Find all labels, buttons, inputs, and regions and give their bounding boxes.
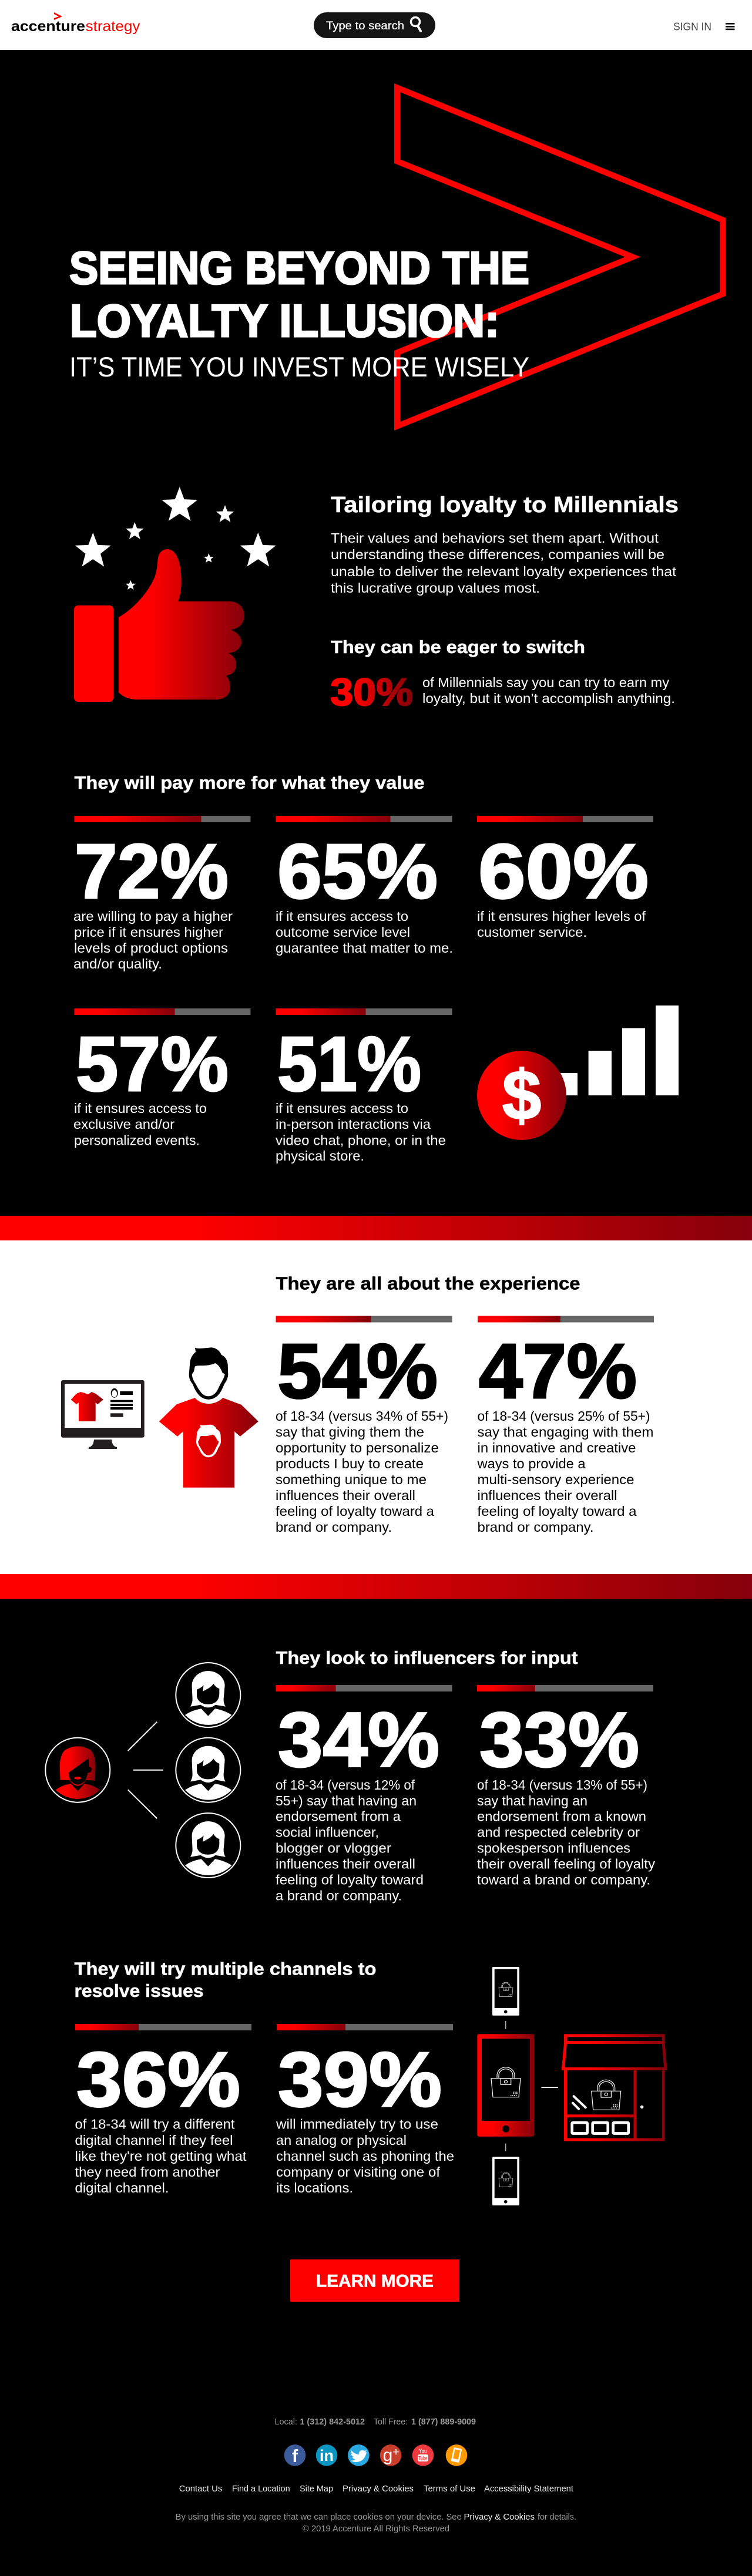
stat: 54%: 54%: [277, 1328, 438, 1414]
stat: 36%: 36%: [76, 2036, 240, 2123]
stat: 33%: say that having an: [477, 1793, 588, 1808]
stat: 54%: products I buy to create: [276, 1456, 424, 1471]
heading: [74, 1958, 376, 2001]
icon: dollar coin with rising bars: $: [502, 1056, 541, 1135]
panel: tailoring loyalty: [74, 487, 679, 714]
panel: influencers: [45, 1647, 656, 1903]
icon: monitor with shirt: [61, 1380, 145, 1449]
stat: 47%: of 18-34 (versus 25% of 55+): [477, 1408, 650, 1424]
cookie notice and copyright: Privacy & Cookies: [464, 2513, 535, 2522]
stat: 57%: 57%: [76, 1021, 229, 1107]
stat: 33%: endorsement from a known: [477, 1809, 646, 1824]
stat: 39%: will immediately try to use: [276, 2117, 438, 2132]
footer links: Find a Location: [232, 2484, 290, 2494]
stat: 47%: ways to provide a: [476, 1456, 586, 1471]
stat: 72%: 72%: [75, 828, 229, 914]
stat: 57%: exclusive and/or: [73, 1117, 174, 1132]
stat: 60%: [477, 816, 653, 940]
stat: 33%: [477, 1685, 656, 1888]
stat: 57%: if it ensures access to: [74, 1101, 207, 1116]
logo: accenture strategy: [11, 12, 140, 35]
heading: eager to switch: They can be eager to switch: [331, 637, 585, 657]
intro paragraph: this lucrative group values most.: [331, 580, 540, 596]
icon: youtube: [412, 2444, 434, 2466]
icon: top phone: [492, 1967, 519, 2016]
stat: 65%: if it ensures access to: [276, 909, 408, 924]
hero panel: [69, 88, 723, 426]
stat: 54%: brand or company.: [276, 1519, 392, 1535]
cookie notice and copyright: © 2019 Accenture All Rights Reserved: [303, 2524, 449, 2534]
icon: thumbs up with stars: [74, 487, 276, 702]
stat: 47%: influences their overall: [477, 1488, 617, 1503]
stat: 34%: of 18-34 (versus 12% of: [276, 1777, 415, 1793]
stat: 47%: brand or company.: [477, 1519, 593, 1535]
heading: They will pay more for what they value: [74, 772, 424, 793]
intro paragraph: [331, 530, 677, 596]
icon: google plus: [380, 2444, 401, 2466]
stat: 60%: 60%: [478, 828, 649, 914]
stat: 33%: toward a brand or company.: [477, 1872, 650, 1888]
stat: 54%: something unique to me: [276, 1472, 427, 1487]
stat: 54%: [276, 1316, 452, 1535]
stat description: of Millennials say you can try to earn my: [422, 675, 670, 690]
stat: 54%: feeling of loyalty toward a: [276, 1504, 434, 1519]
stat: 54%: influences their overall: [276, 1488, 415, 1503]
stat: 57%: personalized events.: [74, 1132, 200, 1148]
title: [69, 242, 529, 347]
stat: 39%: [276, 2024, 454, 2195]
icon: twitter: [348, 2444, 370, 2466]
stat: 51%: physical store.: [276, 1148, 364, 1163]
footer links: Accessibility Statement: [484, 2484, 573, 2494]
icon: youtube: Tube: [418, 2455, 428, 2462]
contact numbers: [275, 2417, 476, 2427]
icon: youtube: You: [419, 2448, 427, 2455]
stat description: [422, 675, 675, 706]
stat: 51%: video chat, phone, or in the: [276, 1132, 446, 1148]
stat: 34%: endorsement from a: [276, 1809, 401, 1824]
stat: 36%: [75, 2024, 251, 2195]
footer: [176, 2417, 576, 2534]
footer links: [179, 2484, 573, 2494]
stat: 47%: multi-sensory experience: [477, 1472, 634, 1487]
learn more button: [290, 2259, 459, 2302]
stat: 39%: its locations.: [276, 2180, 353, 2195]
intro paragraph: understanding these differences, companies will be: [331, 547, 664, 562]
heading: resolve issues: [74, 1980, 203, 2001]
icon: facebook: [284, 2444, 306, 2466]
stat: 72%: and/or quality.: [73, 956, 162, 971]
heading: They are all about the experience: [276, 1273, 580, 1293]
panel: they will pay more: [73, 772, 679, 1163]
contact numbers: 1 (312) 842-5012: [300, 2417, 365, 2427]
panel: multiple channels: [74, 1958, 666, 2205]
stat: 33%: and respected celebrity or: [477, 1824, 640, 1839]
stat: 60%: if it ensures higher levels of: [477, 909, 646, 924]
stat: 72%: price if it ensures higher: [74, 924, 223, 940]
contact numbers: Local:: [275, 2417, 297, 2427]
contact numbers: Toll Free:: [374, 2417, 408, 2427]
footer links: Contact Us: [179, 2484, 222, 2494]
header bar: [0, 0, 752, 50]
social icons: [284, 2444, 467, 2466]
footer links: Site Map: [300, 2484, 333, 2494]
heading: tailoring loyalty to millennials: Tailoring loyalty to Millennials: [331, 493, 679, 517]
stat: 47%: feeling of loyalty toward a: [477, 1504, 637, 1519]
heading: They will try multiple channels to: [74, 1958, 376, 1979]
stat: 57%: [73, 1008, 250, 1148]
stat: 36%: they need from another: [75, 2164, 220, 2180]
sign in: SIGN IN: [673, 21, 711, 33]
icon: google plus: g: [383, 2446, 392, 2465]
stat: 33%: spokesperson influences: [477, 1841, 630, 1856]
intro paragraph: Their values and behaviors set them apart. Without: [331, 530, 659, 546]
stat: 34%: influences their overall: [276, 1856, 415, 1871]
stat: 47%: in innovative and creative: [477, 1440, 636, 1455]
stat: 36%: like they're not getting what: [75, 2148, 247, 2164]
stat: 60%: customer service.: [477, 924, 587, 940]
icon: facebook: f: [292, 2446, 298, 2466]
contact numbers: 1 (877) 889-9009: [411, 2417, 476, 2427]
stat: 33%: 33%: [479, 1696, 639, 1783]
stat: 33%: of 18-34 (versus 13% of 55+): [477, 1777, 647, 1793]
icon: google plus: +: [392, 2446, 400, 2459]
stat: 34%: feeling of loyalty toward: [276, 1872, 424, 1888]
stat: 65%: [276, 816, 453, 956]
title: LOYALTY ILLUSION:: [70, 295, 499, 347]
red gradient band: [0, 1574, 752, 1599]
stat: 34%: 55+) say that having an: [276, 1793, 417, 1808]
stat: 72%: [73, 816, 250, 971]
stat description: loyalty, but it won’t accomplish anything.: [422, 691, 675, 706]
stat: 54%: opportunity to personalize: [276, 1440, 439, 1455]
cookie notice and copyright: By using this site you agree that we can place cookies on your device. See: [176, 2513, 462, 2522]
stat: 39%: 39%: [278, 2036, 442, 2123]
stat: 47%: 47%: [479, 1328, 637, 1414]
icon: mobile: [446, 2444, 467, 2466]
stat: 39%: channel such as phoning the: [276, 2148, 454, 2164]
logo: accenture strategy: accenture: [11, 18, 85, 35]
stat: 72%: are willing to pay a higher: [73, 909, 233, 924]
icon: bottom phone: [492, 2157, 519, 2205]
icon: phones, tablet and store: [477, 1967, 666, 2205]
stat: 36%: digital channel if they feel: [75, 2133, 233, 2148]
logo: accenture strategy: strategy: [86, 18, 140, 35]
stat: 34%: 34%: [278, 1696, 439, 1783]
stat: 39%: company or visiting one of: [276, 2164, 441, 2180]
stat: 51%: [276, 1008, 452, 1163]
icon: person in custom t-shirt: [159, 1347, 258, 1488]
icon: red store: [563, 2036, 666, 2140]
stat: 34%: social influencer,: [276, 1824, 379, 1839]
stat: 33%: their overall feeling of loyalty: [477, 1856, 656, 1871]
footer links: Privacy & Cookies: [343, 2484, 414, 2494]
icon: linkedin: in: [320, 2447, 334, 2464]
search pill: Type to search: [326, 20, 404, 32]
subtitle: IT’S TIME YOU INVEST MORE WISELY: [69, 351, 529, 382]
stat: 30%: 30%: [330, 670, 413, 714]
stat: 51%: if it ensures access to: [276, 1101, 408, 1116]
accenture arrow outline: [397, 88, 723, 426]
stat: 51%: 51%: [277, 1021, 421, 1107]
icon: red tablet: [477, 2034, 534, 2137]
stat: 65%: outcome service level: [276, 924, 410, 940]
intro paragraph: unable to deliver the relevant loyalty experiences that: [331, 564, 677, 579]
heading: They look to influencers for input: [276, 1647, 578, 1668]
cookie notice and copyright: [176, 2513, 576, 2534]
icon: linkedin: [316, 2444, 337, 2466]
stat: 34%: a brand or company.: [276, 1888, 402, 1903]
stat: 65%: 65%: [277, 828, 438, 914]
stat: 34%: [276, 1685, 452, 1903]
cookie notice and copyright: for details.: [538, 2513, 576, 2522]
hamburger menu icon: [726, 23, 734, 30]
stat: 51%: in-person interactions via: [276, 1117, 431, 1132]
stat: 47%: say that engaging with them: [477, 1424, 653, 1440]
stat: 47%: [476, 1316, 654, 1535]
title: SEEING BEYOND THE: [69, 242, 529, 294]
red gradient band: [0, 1216, 752, 1240]
stat: 39%: an analog or physical: [276, 2133, 407, 2148]
stat: 36%: digital channel.: [75, 2180, 169, 2195]
stat: 54%: of 18-34 (versus 34% of 55+): [276, 1408, 448, 1424]
stat: 54%: say that giving them the: [276, 1424, 424, 1440]
icon: influencer network: [45, 1663, 240, 1878]
stat: 34%: blogger or vlogger: [276, 1841, 391, 1856]
stat: 65%: guarantee that matter to me.: [276, 940, 453, 956]
stat: 72%: levels of product options: [74, 940, 228, 956]
learn more button: LEARN MORE: [316, 2272, 434, 2291]
search pill: [314, 12, 435, 38]
icon: dollar coin with rising bars: [477, 1005, 679, 1140]
footer links: Terms of Use: [424, 2484, 475, 2494]
stat: 36%: of 18-34 will try a different: [75, 2117, 235, 2132]
panel: all about the experience: [0, 1240, 752, 1574]
